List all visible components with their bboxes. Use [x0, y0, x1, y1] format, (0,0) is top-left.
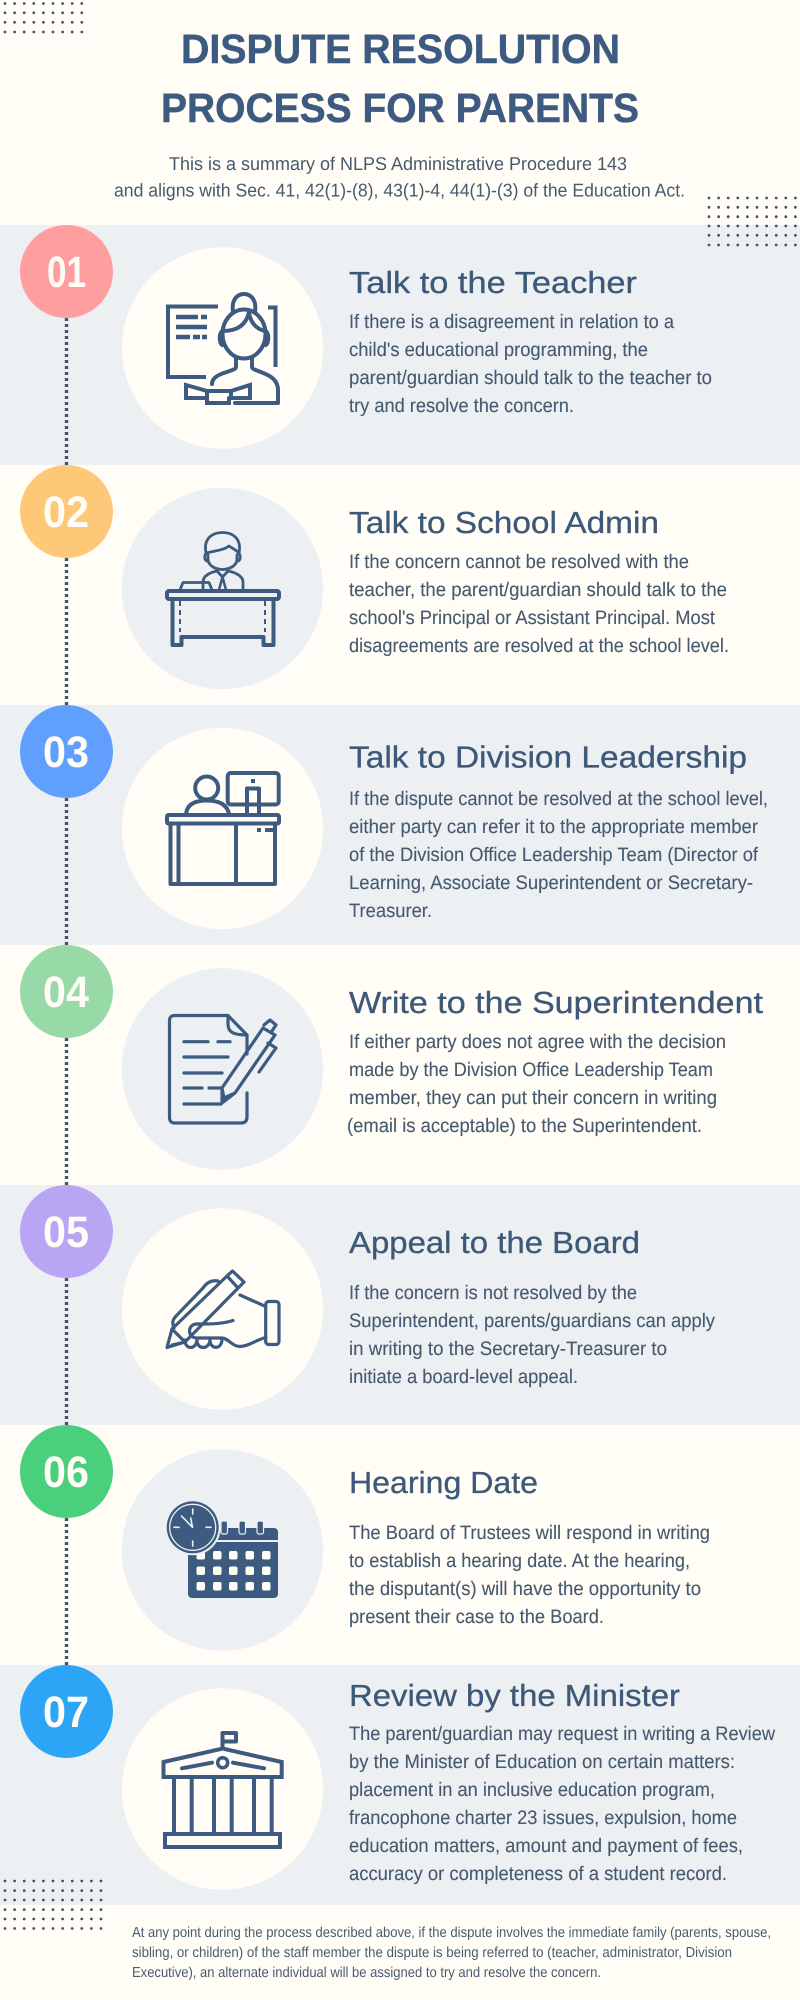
step number 05: 05 [43, 1208, 89, 1257]
step number 07 [20, 1665, 113, 1758]
step number 05 [20, 1185, 113, 1278]
body text: The parent/guardian may request in writing a Review [349, 1723, 776, 1745]
body text: teacher, the parent/guardian should talk to the [349, 579, 727, 601]
title: PROCESS FOR PARENTS [161, 85, 639, 131]
heading: Talk to Division Leadership [349, 740, 747, 774]
body text: parent/guardian should talk to the teacher to [349, 367, 712, 389]
footer note [132, 1925, 771, 1981]
body text: school's Principal or Assistant Principal. Most [349, 607, 716, 629]
panel: step 3 talk to division leadership [0, 705, 800, 945]
body text: by the Minister of Education on certain matters: [349, 1751, 735, 1773]
subtitle: This is a summary of NLPS Administrative Procedure 143 [169, 153, 627, 174]
step number 06: 06 [43, 1448, 89, 1497]
body text: Treasurer. [349, 900, 432, 922]
body text: If either party does not agree with the decision [349, 1031, 726, 1053]
decorative dot grid: upper right [709, 198, 796, 245]
heading: Talk to the Teacher [349, 266, 637, 300]
step number 03 [20, 705, 113, 798]
body text: initiate a board-level appeal. [349, 1366, 578, 1388]
body text: the disputant(s) will have the opportunity to [349, 1578, 701, 1600]
icon: leader at computer desk [167, 773, 279, 884]
body text: member, they can put their concern in writing [349, 1087, 717, 1109]
panel: step 7 review by the minister [0, 1665, 800, 1905]
body text: education matters, amount and payment of fees, [349, 1835, 743, 1857]
step number 03: 03 [43, 728, 89, 777]
footer note: sibling, or children) of the staff member the dispute is being referred to (teacher, administrator, Division [132, 1945, 732, 1961]
body text: Superintendent, parents/guardians can apply [349, 1310, 715, 1332]
body text [349, 788, 768, 922]
body text [347, 1031, 726, 1137]
body text: accuracy or completeness of a student record. [349, 1863, 727, 1885]
body text [349, 311, 712, 417]
body text: placement in an inclusive education program, [349, 1779, 715, 1801]
title: DISPUTE RESOLUTION [181, 26, 620, 72]
icon: teacher with board and book [168, 294, 278, 403]
icon: government building with flag [164, 1733, 282, 1847]
body text [349, 1522, 710, 1628]
panel: step 4 write to the superintendent [20, 945, 764, 1185]
icon: document and pen [170, 1016, 276, 1123]
body text: If the concern cannot be resolved with the [349, 551, 689, 573]
body text: The Board of Trustees will respond in writing [349, 1522, 710, 1544]
body text [349, 1282, 715, 1388]
heading: Appeal to the Board [349, 1226, 640, 1260]
panel: step 5 appeal to the board [0, 1185, 800, 1425]
body text: If there is a disagreement in relation to a [349, 311, 674, 333]
body text: francophone charter 23 issues, expulsion, home [349, 1807, 737, 1829]
body text: in writing to the Secretary-Treasurer to [349, 1338, 667, 1360]
body text: either party can refer it to the appropriate member [349, 816, 758, 838]
subtitle: and aligns with Sec. 41, 42(1)-(8), 43(1)-4, 44(1)-(3) of the Education Act. [114, 180, 685, 200]
body text: present their case to the Board. [349, 1606, 604, 1628]
heading: Review by the Minister [349, 1679, 680, 1713]
body text: disagreements are resolved at the school level. [349, 635, 729, 657]
step number 06 [20, 1425, 113, 1518]
title [161, 26, 639, 131]
step number 04: 04 [43, 968, 89, 1017]
panel: step 1 talk to the teacher [0, 225, 800, 465]
body text: of the Division Office Leadership Team (Director of [349, 844, 759, 866]
decorative dot grid: top left [5, 4, 84, 32]
heading: Hearing Date [349, 1466, 538, 1500]
heading: Talk to School Admin [349, 506, 659, 540]
body text [349, 551, 729, 657]
body text: to establish a hearing date. At the hearing, [349, 1550, 690, 1572]
step number 02: 02 [43, 488, 89, 537]
panel: step 6 hearing date [20, 1425, 710, 1665]
body text: made by the Division Office Leadership Team [349, 1059, 713, 1081]
body text: child's educational programming, the [349, 339, 648, 361]
icon: hand writing with pen [167, 1271, 279, 1348]
footer note: Executive), an alternate individual will be assigned to try and resolve the concern. [132, 1965, 601, 1981]
body text: (email is acceptable) to the Superintendent. [347, 1115, 702, 1137]
icon: administrator at desk [167, 532, 279, 645]
subtitle [114, 153, 685, 200]
step number 01: 01 [47, 248, 86, 297]
body text: Learning, Associate Superintendent or Secretary- [349, 872, 753, 894]
icon: calendar and clock [165, 1499, 278, 1598]
step number 01 [20, 225, 113, 318]
step number 07: 07 [43, 1688, 89, 1737]
body text: If the dispute cannot be resolved at the school level, [349, 788, 768, 810]
body text: try and resolve the concern. [349, 395, 574, 417]
panel: step 2 talk to school admin [20, 465, 729, 705]
step number 04 [20, 945, 113, 1038]
heading: Write to the Superintendent [349, 986, 764, 1020]
body text: If the concern is not resolved by the [349, 1282, 637, 1304]
body text [349, 1723, 776, 1885]
decorative dot grid: lower left [5, 1881, 102, 1928]
step number 02 [20, 465, 113, 558]
